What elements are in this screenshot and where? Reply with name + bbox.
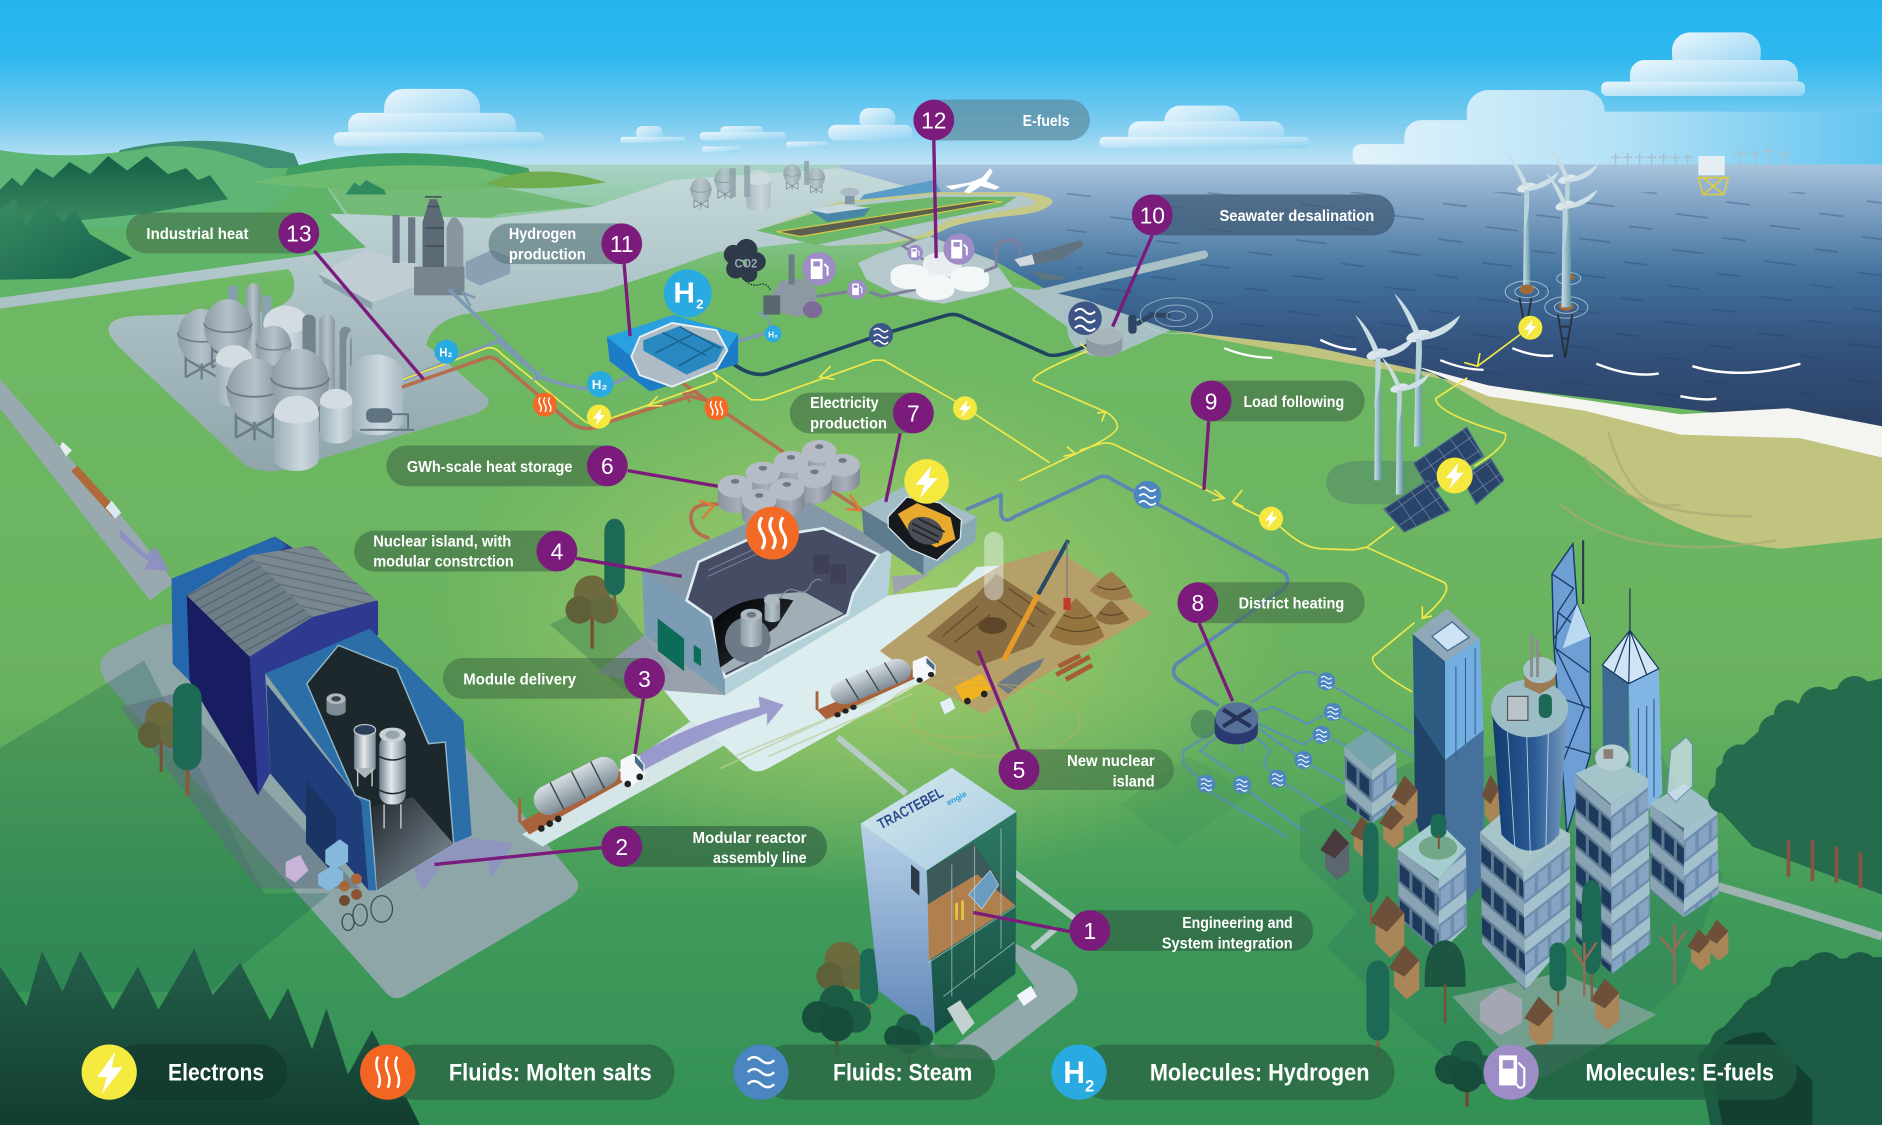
coastal apron [1012,287,1086,327]
desalination plant [1086,298,1212,357]
trees beside nuclear island [550,519,672,690]
callout 4: nuclear island: 4 [551,538,564,564]
callout 12: e-fuels [913,100,1090,258]
callout 9: load following: 9 [1205,388,1217,414]
factory trees [138,683,202,796]
callout 10: seawater desalination [1113,195,1395,327]
callout 13: industrial heat [126,213,424,379]
bottom-left forest [0,949,420,1125]
sea [840,164,1882,432]
badge: electricity nodes [587,316,1542,531]
badge: hydrogen nodes [434,325,781,397]
factory shadow [0,660,330,992]
legend: steam: Fluids: Steam [833,1060,972,1087]
left road [0,379,174,600]
far refineries [690,161,825,211]
logo: TRACTEBEL [875,784,946,833]
callout 6: heat storage: 6 [601,453,614,479]
callout 8: district heating [1177,582,1365,701]
badge: e-fuel nodes [802,234,975,299]
callout 5: new nuclear island: 5 [1013,757,1025,783]
callout 11: hydrogen production: production [509,246,586,263]
callout 1: engineering: Engineering and [1182,915,1293,932]
legend: electrons [82,1045,287,1100]
e-fuel storage tanks [880,227,989,300]
district steam pipe [967,476,1288,705]
callout 5: new nuclear island: New nuclear [1067,753,1155,770]
offshore wind turbines [1505,147,1598,358]
nuclear island [597,498,930,695]
tower: pyramid top [1602,588,1662,828]
city houses and trees [1363,822,1728,1107]
airport and peninsula [756,168,1053,246]
legend: hydrogen [1051,1045,1395,1100]
icon: large electricity [904,459,949,504]
callout 4: nuclear island: modular constrction [373,554,514,571]
callout 4: nuclear island [354,531,682,576]
callout 6: heat storage: GWh-scale heat storage [407,459,573,476]
badge: hydrogen nodes: H₂ [439,346,452,360]
icon: large hydrogen [664,269,712,317]
icon: large molten salt [746,507,799,559]
callout 3: module delivery: 3 [638,666,651,692]
legend: e-fuels [1484,1045,1797,1100]
callout 3: module delivery: Module delivery [463,671,576,688]
flow arrows [463,293,1480,618]
solar panels [1384,427,1504,532]
far fields [324,182,594,217]
steel plant [318,197,510,310]
callout 2: assembly line: 2 [615,834,628,860]
hydrogen facility [607,315,738,391]
callout 4: nuclear island: Nuclear island, with [373,533,511,550]
tower by Tractebel trees [816,942,878,1021]
right road [1716,886,1882,936]
badge: hydrogen nodes: H₂ [768,329,778,339]
far-left meadow [0,168,366,298]
callout 1: engineering: System integration [1162,936,1293,953]
callout 2: assembly line: Modular reactor [693,830,807,847]
callout 7: electricity production: 7 [907,400,920,426]
legend: molten salts: Fluids: Molten salts [449,1060,652,1087]
badge: hydrogen nodes: H₂ [592,377,607,392]
road to plant [522,722,724,846]
callout 11: hydrogen production [489,223,642,336]
legend: hydrogen: H [1063,1055,1085,1090]
central ground glow [432,360,1296,888]
pier [1042,255,1204,293]
callout 5: new nuclear island [978,651,1174,790]
hills and far forest [0,141,606,280]
onshore wind turbines [1326,293,1460,504]
callout 9: load following [1191,381,1365,490]
nuclear pad [664,564,1032,771]
callout 1: engineering [973,910,1313,953]
molten salt pipes [403,357,862,538]
callout 2: assembly line [434,826,827,867]
icon: large hydrogen: 2 [696,297,703,312]
callout 13: industrial heat: Industrial heat [146,226,248,243]
assembly line factory [172,537,472,890]
heat storage tanks [718,440,860,527]
tower lawn [927,961,1035,1051]
sea water pipe [729,314,1090,374]
callout 7: electricity production: production [810,416,887,433]
right forest [1697,676,1882,1125]
city pad [1452,973,1656,1077]
small block left [1344,730,1397,824]
factory yard items [286,839,392,930]
callout 10: seawater desalination: Seawater desalination [1219,208,1374,225]
electricity lines [403,335,1520,692]
beach [1169,330,1882,549]
trees below tower [802,985,933,1065]
central block [1480,802,1570,991]
e-fuel plant: CO2 [735,257,758,271]
pipelines [403,291,1520,837]
callout 1: engineering: 1 [1083,918,1096,944]
callout 6: heat storage [386,445,718,486]
district heating network [1183,672,1420,837]
city ground shadow [1300,744,1722,1057]
Tractebel tower: engie [945,789,969,807]
callout 8: district heating: 8 [1192,590,1204,616]
construction site [720,532,1152,768]
icon: large hydrogen: H [673,278,695,310]
clouds [334,32,1882,167]
callout 13: industrial heat: 13 [286,220,312,246]
highway truck [60,442,121,519]
far grey plain and industrial pad [0,168,927,471]
legend [82,1045,1797,1100]
callout 11: hydrogen production: Hydrogen [509,226,576,243]
callout 12: e-fuels: E-fuels [1023,113,1070,130]
houses behind blocks [1320,774,1499,880]
block left [1398,814,1467,954]
turbine hall [862,485,977,575]
e-fuel plant [724,239,916,330]
legend: steam [733,1045,995,1100]
industrial plant [178,283,414,471]
tower pad [927,943,1078,1060]
far offshore wind farm and platform [1611,146,1790,195]
shadow on factory pad [120,694,360,888]
district heating badges [1197,672,1342,794]
callout 9: load following: Load following [1243,394,1344,411]
callout 3: module delivery [443,658,665,754]
legend: hydrogen: Molecules: Hydrogen [1150,1060,1369,1087]
legend: electrons: Electrons [168,1060,264,1087]
legend: molten salts [360,1045,675,1100]
delivery van [1017,986,1037,1006]
sky [0,0,1882,168]
tower: tall blue [1413,609,1484,924]
district heating hub [1191,702,1258,744]
purple delivery arrows [120,529,784,891]
flow badges [434,234,1542,531]
desalination pad [1067,300,1170,357]
legend: e-fuels: Molecules: E-fuels [1586,1060,1774,1087]
callout 8: district heating: District heating [1239,596,1344,613]
city skyline [1320,540,1719,991]
callout 7: electricity production: Electricity [810,395,879,412]
Tractebel tower [861,768,1017,1035]
e-fuel port apron [858,237,1013,304]
ships and port pipe [984,240,1084,280]
factory pad [100,624,578,998]
callout 2: assembly line: assembly line [713,850,807,867]
callout 7: electricity production [790,393,934,502]
lawn patch beside hub [1120,756,1254,846]
badge: heat nodes [533,393,729,420]
callout 5: new nuclear island: island [1113,773,1155,790]
legend: hydrogen: 2 [1085,1076,1094,1095]
tower: faceted glass [1552,540,1590,833]
service road [838,737,1077,949]
badge: steam nodes [869,301,1161,508]
wave foam [1224,340,1882,547]
callout 12: e-fuels: 12 [921,107,946,133]
block far right [1650,737,1719,917]
callout 11: hydrogen production: 11 [610,231,634,257]
cylinder tower [1491,634,1568,855]
far grove [346,180,386,195]
hydrogen pipes [404,291,768,389]
module trucks [520,655,936,834]
block right [1575,744,1650,974]
callout 10: seawater desalination: 10 [1140,202,1165,228]
